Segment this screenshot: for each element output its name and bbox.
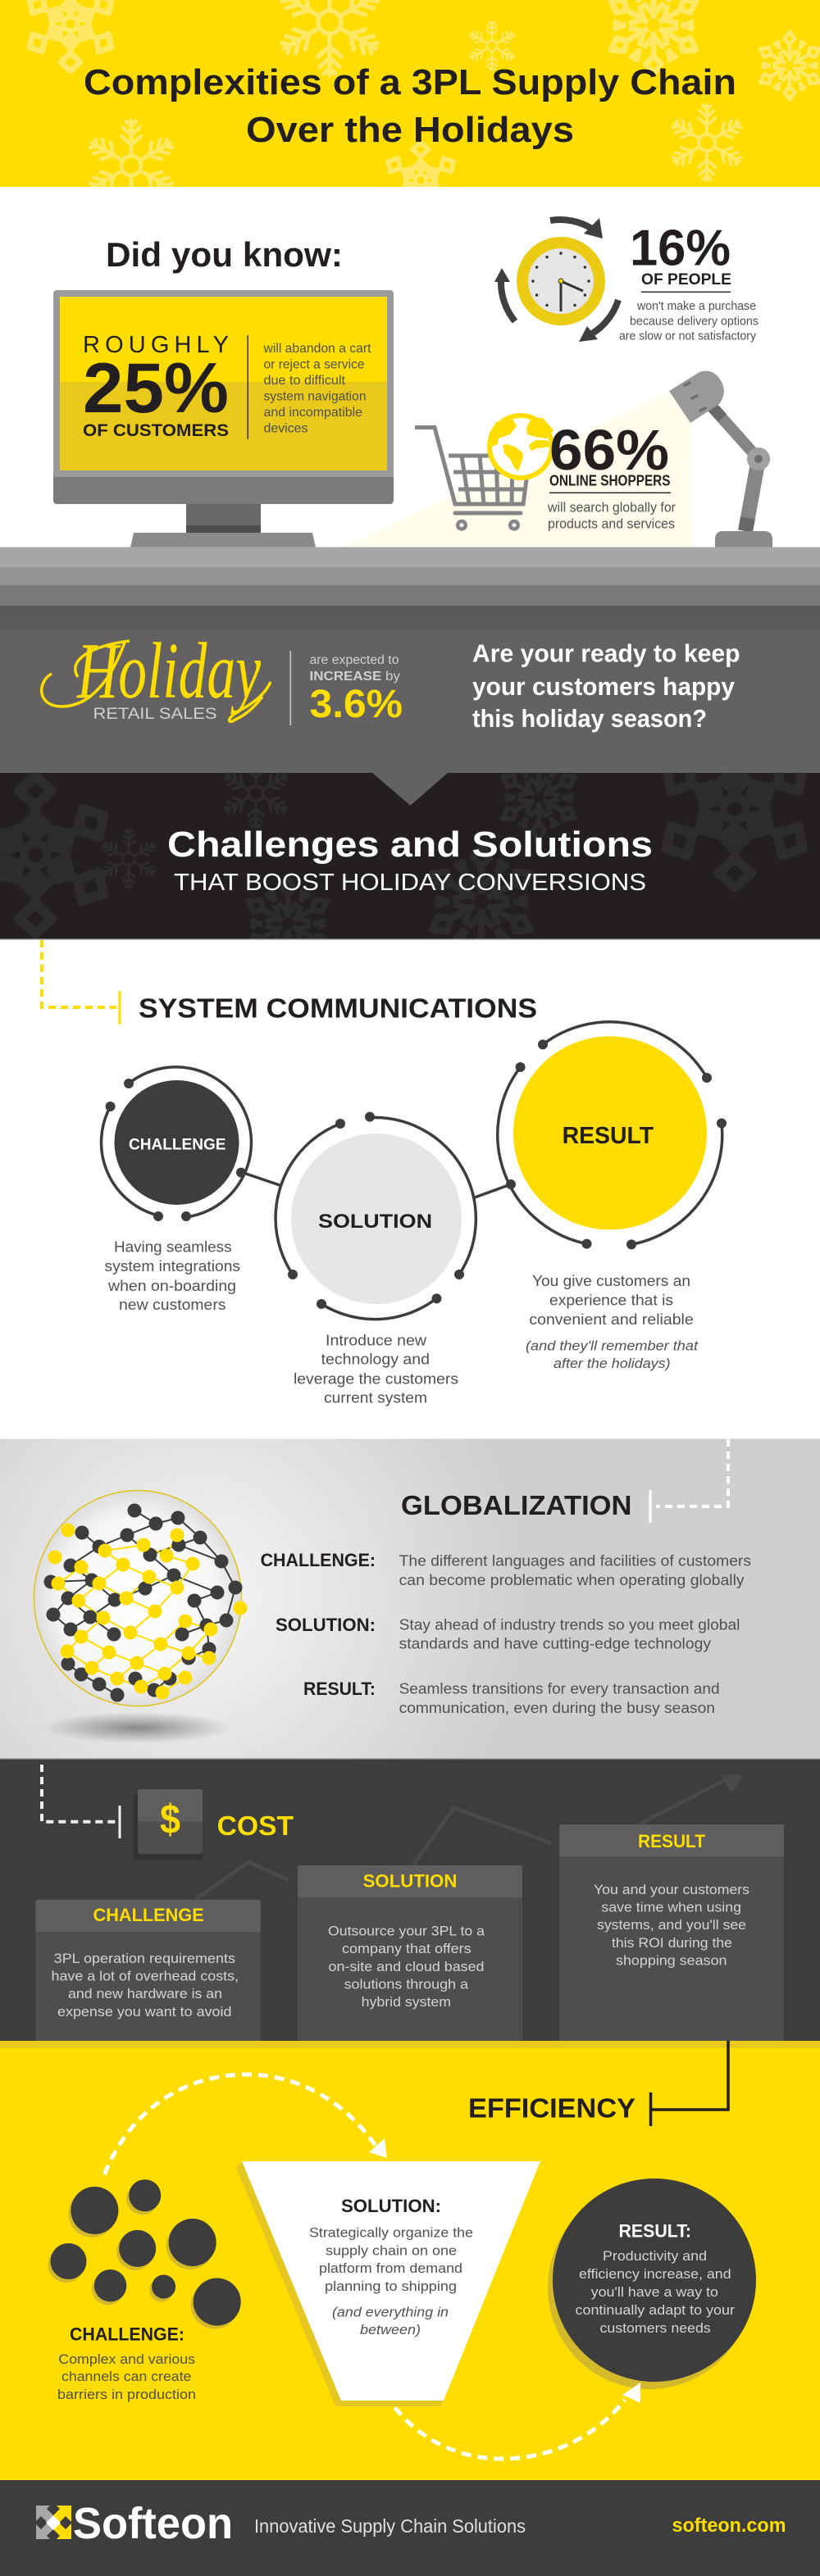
- circle: solution: SOLUTION: [318, 1211, 432, 1233]
- card: challenge: have a lot of overhead costs,: [51, 1969, 239, 1984]
- row: challenge: can become problematic when operating globally: [399, 1571, 745, 1588]
- title: [84, 62, 736, 150]
- stat: roughly 25% of customers: 25%: [83, 349, 229, 428]
- row: solution: Stay ahead of industry trends so you meet global: [399, 1616, 740, 1633]
- panel: challenges and solutions banner: [0, 773, 820, 940]
- circle: result: efficiency increase, and: [579, 2266, 731, 2282]
- stat: 66% online shoppers: 66%: [549, 418, 669, 482]
- row: result: communication, even during the busy season: [399, 1699, 715, 1716]
- card: challenge: 3PL operation requirements: [54, 1951, 235, 1966]
- icon: dollar sign tile: $: [160, 1797, 180, 1842]
- stat description: devices: [264, 421, 308, 436]
- stat: roughly 25% of customers: ROUGHLY: [83, 332, 229, 358]
- dark snowflakes: [0, 730, 811, 969]
- card: solution: SOLUTION: [363, 1871, 457, 1892]
- stat description: [263, 342, 371, 436]
- stat: 16% of people: are slow or not satisfactory: [619, 330, 757, 343]
- stat: 66% online shoppers: products and services: [548, 517, 675, 532]
- text: challenge: CHALLENGE:: [70, 2324, 184, 2344]
- funnel: solution: SOLUTION:: [341, 2196, 441, 2216]
- card: solution: hybrid system: [362, 1995, 451, 2010]
- stat: 16% of people: because delivery options: [630, 315, 758, 328]
- panel: globalization: [0, 1439, 820, 1759]
- card: result: RESULT: [638, 1831, 706, 1851]
- monitor with 25% statistic: [53, 290, 394, 547]
- stat: increase by 3.6%: are expected to: [310, 653, 399, 667]
- stat: 66% online shoppers: [547, 418, 676, 532]
- card: solution: [298, 1865, 522, 2041]
- tagline: Innovative Supply Chain Solutions: [254, 2515, 526, 2537]
- circle: result: [548, 2178, 756, 2389]
- header snowflakes: [25, 0, 820, 218]
- card: result: save time when using: [601, 1901, 741, 1915]
- heading: system communications: SYSTEM COMMUNICATIONS: [139, 993, 537, 1024]
- connectors between circles: [241, 1172, 511, 1197]
- heading: globalization: GLOBALIZATION: [401, 1490, 631, 1520]
- row: solution: SOLUTION:: [276, 1615, 376, 1635]
- funnel: solution: platform from demand: [319, 2260, 462, 2276]
- text: challenge description: system integrations: [105, 1258, 240, 1274]
- icon: network globe: [34, 1490, 241, 1706]
- icon: desk lamp: [669, 370, 772, 547]
- heading: cost: COST: [217, 1810, 294, 1841]
- row: solution: [276, 1615, 740, 1652]
- footer: [0, 2480, 820, 2576]
- row: challenge: CHALLENGE:: [261, 1550, 376, 1570]
- circle: result: [498, 1022, 722, 1244]
- text: result description: (and they'll remember that: [526, 1338, 699, 1354]
- panel: cost: [0, 1758, 820, 2041]
- card: challenge: [35, 1900, 261, 2041]
- icon: clock with cycle arrows: [494, 218, 618, 342]
- question callout: Are your ready to keep: [472, 639, 740, 668]
- script word: holiday: Holiday: [76, 627, 261, 716]
- website: softeon.com: [672, 2515, 786, 2537]
- row: result: [303, 1679, 720, 1716]
- funnel: solution: between): [360, 2322, 421, 2337]
- header band: [0, 0, 820, 187]
- card: result: You and your customers: [594, 1883, 749, 1897]
- text: solution description: leverage the customers: [294, 1370, 458, 1387]
- stat description: system navigation: [264, 390, 366, 403]
- banner heading: [167, 825, 653, 896]
- title: Over the Holidays: [246, 110, 574, 150]
- stat description: and incompatible: [264, 406, 362, 420]
- text: solution description: current system: [324, 1389, 427, 1406]
- stat description: will abandon a cart: [263, 342, 371, 356]
- lamp light beam: [345, 392, 692, 547]
- icon: yellow globe: [487, 413, 554, 480]
- icon: dollar sign tile: [134, 1789, 203, 1860]
- text: challenge: barriers in production: [57, 2387, 196, 2402]
- card: challenge: expense you want to avoid: [57, 2005, 231, 2019]
- stat: 16% of people: 16%: [630, 220, 731, 277]
- text: result description: convenient and reliable: [529, 1311, 694, 1328]
- card: challenge: CHALLENGE: [93, 1905, 204, 1925]
- connector: white dashed line: [649, 1439, 728, 1523]
- stat: 66% online shoppers: will search globally for: [547, 500, 676, 515]
- text: solution description: technology and: [321, 1352, 430, 1368]
- icon: shopping cart: [415, 428, 530, 531]
- row: result: Seamless transitions for every transaction and: [399, 1680, 720, 1697]
- arrow pointer: [372, 773, 448, 806]
- text: challenge: channels can create: [61, 2369, 191, 2384]
- script word: holiday: [42, 627, 271, 721]
- connector: white dashed line: [42, 1765, 121, 1838]
- panel: holiday retail sales: [0, 627, 820, 773]
- panel: holiday retail sales: RETAIL SALES: [93, 706, 216, 723]
- circle: result: continually adapt to your: [576, 2302, 735, 2318]
- connector: yellow dashed line to system communications: [42, 940, 121, 1024]
- stat: increase by 3.6%: [310, 653, 403, 726]
- text: challenge description: Having seamless: [114, 1239, 231, 1256]
- globe shadow: [43, 1712, 231, 1743]
- background rising arrow: [196, 1774, 743, 1899]
- funnel: solution: [236, 2161, 540, 2406]
- funnel: solution: Strategically organize the: [309, 2224, 473, 2241]
- question callout: this holiday season?: [472, 704, 707, 733]
- row: result: RESULT:: [303, 1679, 376, 1699]
- stat description: due to difficult: [264, 374, 346, 388]
- question callout: your customers happy: [472, 672, 736, 701]
- stat: increase by 3.6%: 3.6%: [310, 683, 403, 726]
- title: Complexities of a 3PL Supply Chain: [84, 62, 736, 102]
- connector: black line: [649, 2041, 728, 2126]
- card: solution: on-site and cloud based: [328, 1960, 484, 1974]
- text: challenge: [57, 2324, 196, 2402]
- stat: increase by 3.6%: INCREASE by: [310, 670, 400, 684]
- monitor stand: [130, 504, 316, 547]
- arrow: solution to result: [395, 2383, 640, 2459]
- row: challenge: [261, 1550, 751, 1588]
- circle: solution: [276, 1117, 476, 1320]
- text: challenge description: [105, 1239, 240, 1313]
- card: solution: Outsource your 3PL to a: [328, 1924, 485, 1939]
- row: challenge: The different languages and facilities of customers: [399, 1552, 751, 1570]
- circle: result: Productivity and: [603, 2248, 707, 2264]
- funnel: solution: planning to shipping: [325, 2278, 457, 2294]
- banner heading: THAT BOOST HOLIDAY CONVERSIONS: [174, 870, 646, 896]
- circle: challenge: [102, 1067, 251, 1217]
- row: solution: standards and have cutting-edge technology: [399, 1635, 712, 1652]
- stat: 16% of people: [619, 220, 758, 343]
- text: result description: experience that is: [549, 1293, 673, 1309]
- heading: efficiency: EFFICIENCY: [468, 2093, 636, 2124]
- stat: 16% of people: OF PEOPLE: [641, 271, 731, 288]
- text: solution description: [294, 1332, 458, 1406]
- desk table bands: [0, 547, 820, 629]
- text: challenge description: new customers: [119, 1297, 226, 1313]
- stat: 66% online shoppers: ONLINE SHOPPERS: [549, 471, 671, 488]
- text: challenge description: when on-boarding: [107, 1278, 236, 1294]
- circle: result: RESULT: [563, 1123, 654, 1149]
- icon: scattered channel dots: [48, 2179, 241, 2329]
- stat description: or reject a service: [264, 357, 365, 372]
- text: result description: [526, 1273, 699, 1371]
- arrow: challenge to solution: [105, 2074, 387, 2174]
- funnel: solution: supply chain on one: [326, 2242, 457, 2259]
- text: solution description: Introduce new: [326, 1332, 427, 1348]
- circle: result: you'll have a way to: [591, 2284, 718, 2300]
- card: challenge: and new hardware is an: [68, 1987, 222, 2001]
- card: result: shopping season: [616, 1954, 727, 1969]
- text: challenge: Complex and various: [58, 2351, 195, 2367]
- funnel: solution: (and everything in: [332, 2305, 449, 2320]
- circle: result: RESULT:: [618, 2221, 691, 2241]
- question callout: [472, 639, 740, 733]
- card: result: [559, 1824, 784, 2041]
- card: result: systems, and you'll see: [597, 1918, 746, 1933]
- logo wordmark: Softeon: [73, 2499, 233, 2548]
- card: result: this ROI during the: [612, 1936, 732, 1951]
- card: solution: company that offers: [342, 1942, 472, 1956]
- heading: did you know: Did you know:: [106, 235, 343, 274]
- text: result description: after the holidays): [554, 1356, 671, 1371]
- banner heading: Challenges and Solutions: [167, 825, 653, 865]
- text: result description: You give customers an: [532, 1273, 690, 1289]
- stat: 16% of people: won't make a purchase: [636, 300, 756, 313]
- circle: challenge: CHALLENGE: [129, 1137, 226, 1154]
- card: solution: solutions through a: [344, 1978, 469, 1992]
- logo mark: [34, 2502, 72, 2542]
- stat: roughly 25% of customers: OF CUSTOMERS: [83, 421, 229, 440]
- panel: efficiency: [0, 2041, 820, 2480]
- circle: result: customers needs: [600, 2320, 711, 2336]
